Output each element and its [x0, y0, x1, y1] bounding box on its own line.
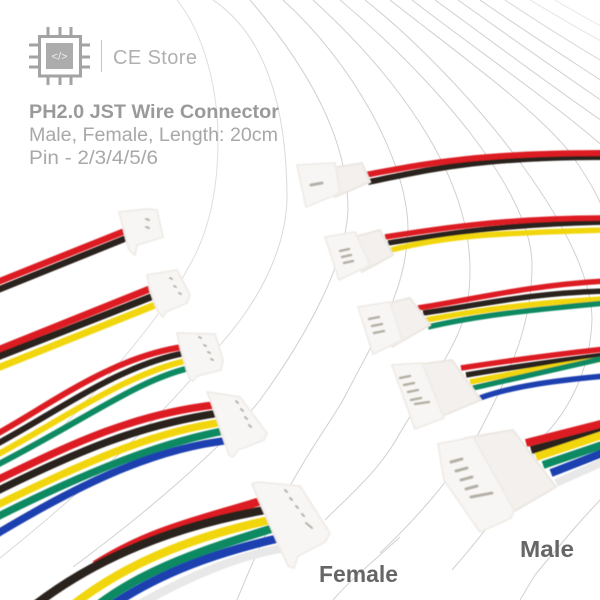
- female connector: 5 pin: [0, 392, 267, 535]
- specification: pins: Pin - 2/3/4/5/6: [29, 148, 158, 169]
- label: Female: Female: [319, 561, 398, 587]
- male connector: 5 pin: [392, 349, 600, 429]
- label: Male: Male: [520, 536, 574, 562]
- male connector: 3 pin: [325, 218, 600, 280]
- brand name: CE Store: [113, 47, 197, 69]
- logo: CE Store: [29, 27, 197, 85]
- female connector: 3 pin: [0, 270, 190, 369]
- icon: microchip: </>: [52, 51, 67, 63]
- male connector: 4 pin: [358, 281, 600, 354]
- male connector: 2 pin: [297, 153, 600, 207]
- icon: microchip: [29, 27, 90, 85]
- female connector: 6 pin: [35, 482, 330, 600]
- female connector: 4 pin: [0, 333, 223, 466]
- heading: PH2.0 JST Wire Connector: [29, 102, 280, 123]
- female connector: 2 pin: [0, 209, 163, 291]
- specification: length: Male, Female, Length: 20cm: [29, 125, 278, 146]
- male connector: 6 pin: [438, 423, 600, 532]
- product description text: [29, 102, 280, 169]
